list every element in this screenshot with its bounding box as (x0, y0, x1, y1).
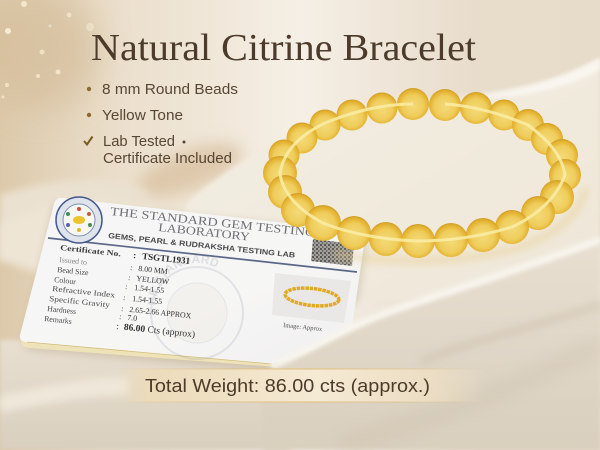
rule (48, 238, 357, 272)
certificate fields: : 2.65-2.66 APPROX (121, 304, 192, 320)
lower left silk (0, 340, 290, 450)
seal watermark: THE STANDARD (148, 255, 218, 314)
certificate fields: : 1.54-1.55 (125, 282, 165, 295)
QR code (311, 239, 354, 266)
lab name (110, 204, 317, 244)
lab name: THE STANDARD GEM TESTING (110, 204, 317, 240)
certificate fields: Specific Gravity (49, 294, 111, 309)
feature list (84, 82, 238, 167)
total weight banner (115, 368, 485, 402)
bracelet (263, 88, 585, 261)
glitter (2, 1, 94, 98)
bullet: lab tested, certificate included (84, 134, 232, 167)
certificate fields: : 86.00 Cts (approx) (116, 321, 196, 340)
image caption: Image: Approx (283, 322, 323, 333)
white silk fold (185, 58, 600, 300)
certificate fields (44, 243, 196, 340)
certificate fields: Colour (54, 275, 77, 286)
certificate card (20, 196, 370, 368)
certificate fields: Issued to (59, 255, 88, 267)
certificate fields: Bead Size (57, 265, 89, 277)
certificate fields: : 8.00 MM (130, 263, 168, 276)
title: Natural Citrine Bracelet (91, 27, 476, 69)
seal watermark (148, 255, 244, 360)
certificate fields: : 1.54-1.55 (123, 293, 163, 306)
mini bracelet photo (272, 273, 351, 323)
lab logo (56, 197, 102, 243)
bullet: yellow tone: Yellow Tone (102, 108, 183, 124)
certificate fields: Remarks (44, 314, 72, 326)
certificate fields: : 7.0 (119, 312, 138, 323)
certificate fields: Refractive Index (52, 284, 116, 300)
certificate fields: Certificate No. (60, 243, 121, 258)
bullet: 8 mm round beads: 8 mm Round Beads (102, 82, 238, 98)
bullet: lab tested, certificate included: Certificate Included (103, 151, 232, 167)
elastic cord glow (280, 104, 565, 241)
lab name: LABORATORY (158, 220, 251, 244)
certificate fields: : TSGTL1931 (133, 250, 191, 266)
bullet: lab tested, certificate included: Lab Tested (103, 134, 175, 150)
lower right silk drape (262, 240, 600, 450)
certificate fields: Hardness (47, 304, 77, 316)
certificate fields: : YELLOW (128, 273, 170, 286)
total weight text: Total Weight: 86.00 cts (approx.) (145, 375, 430, 396)
lab subtitle: GEMS, PEARL & RUDRAKSHA TESTING LAB (108, 231, 296, 260)
left silk under text (0, 180, 150, 260)
